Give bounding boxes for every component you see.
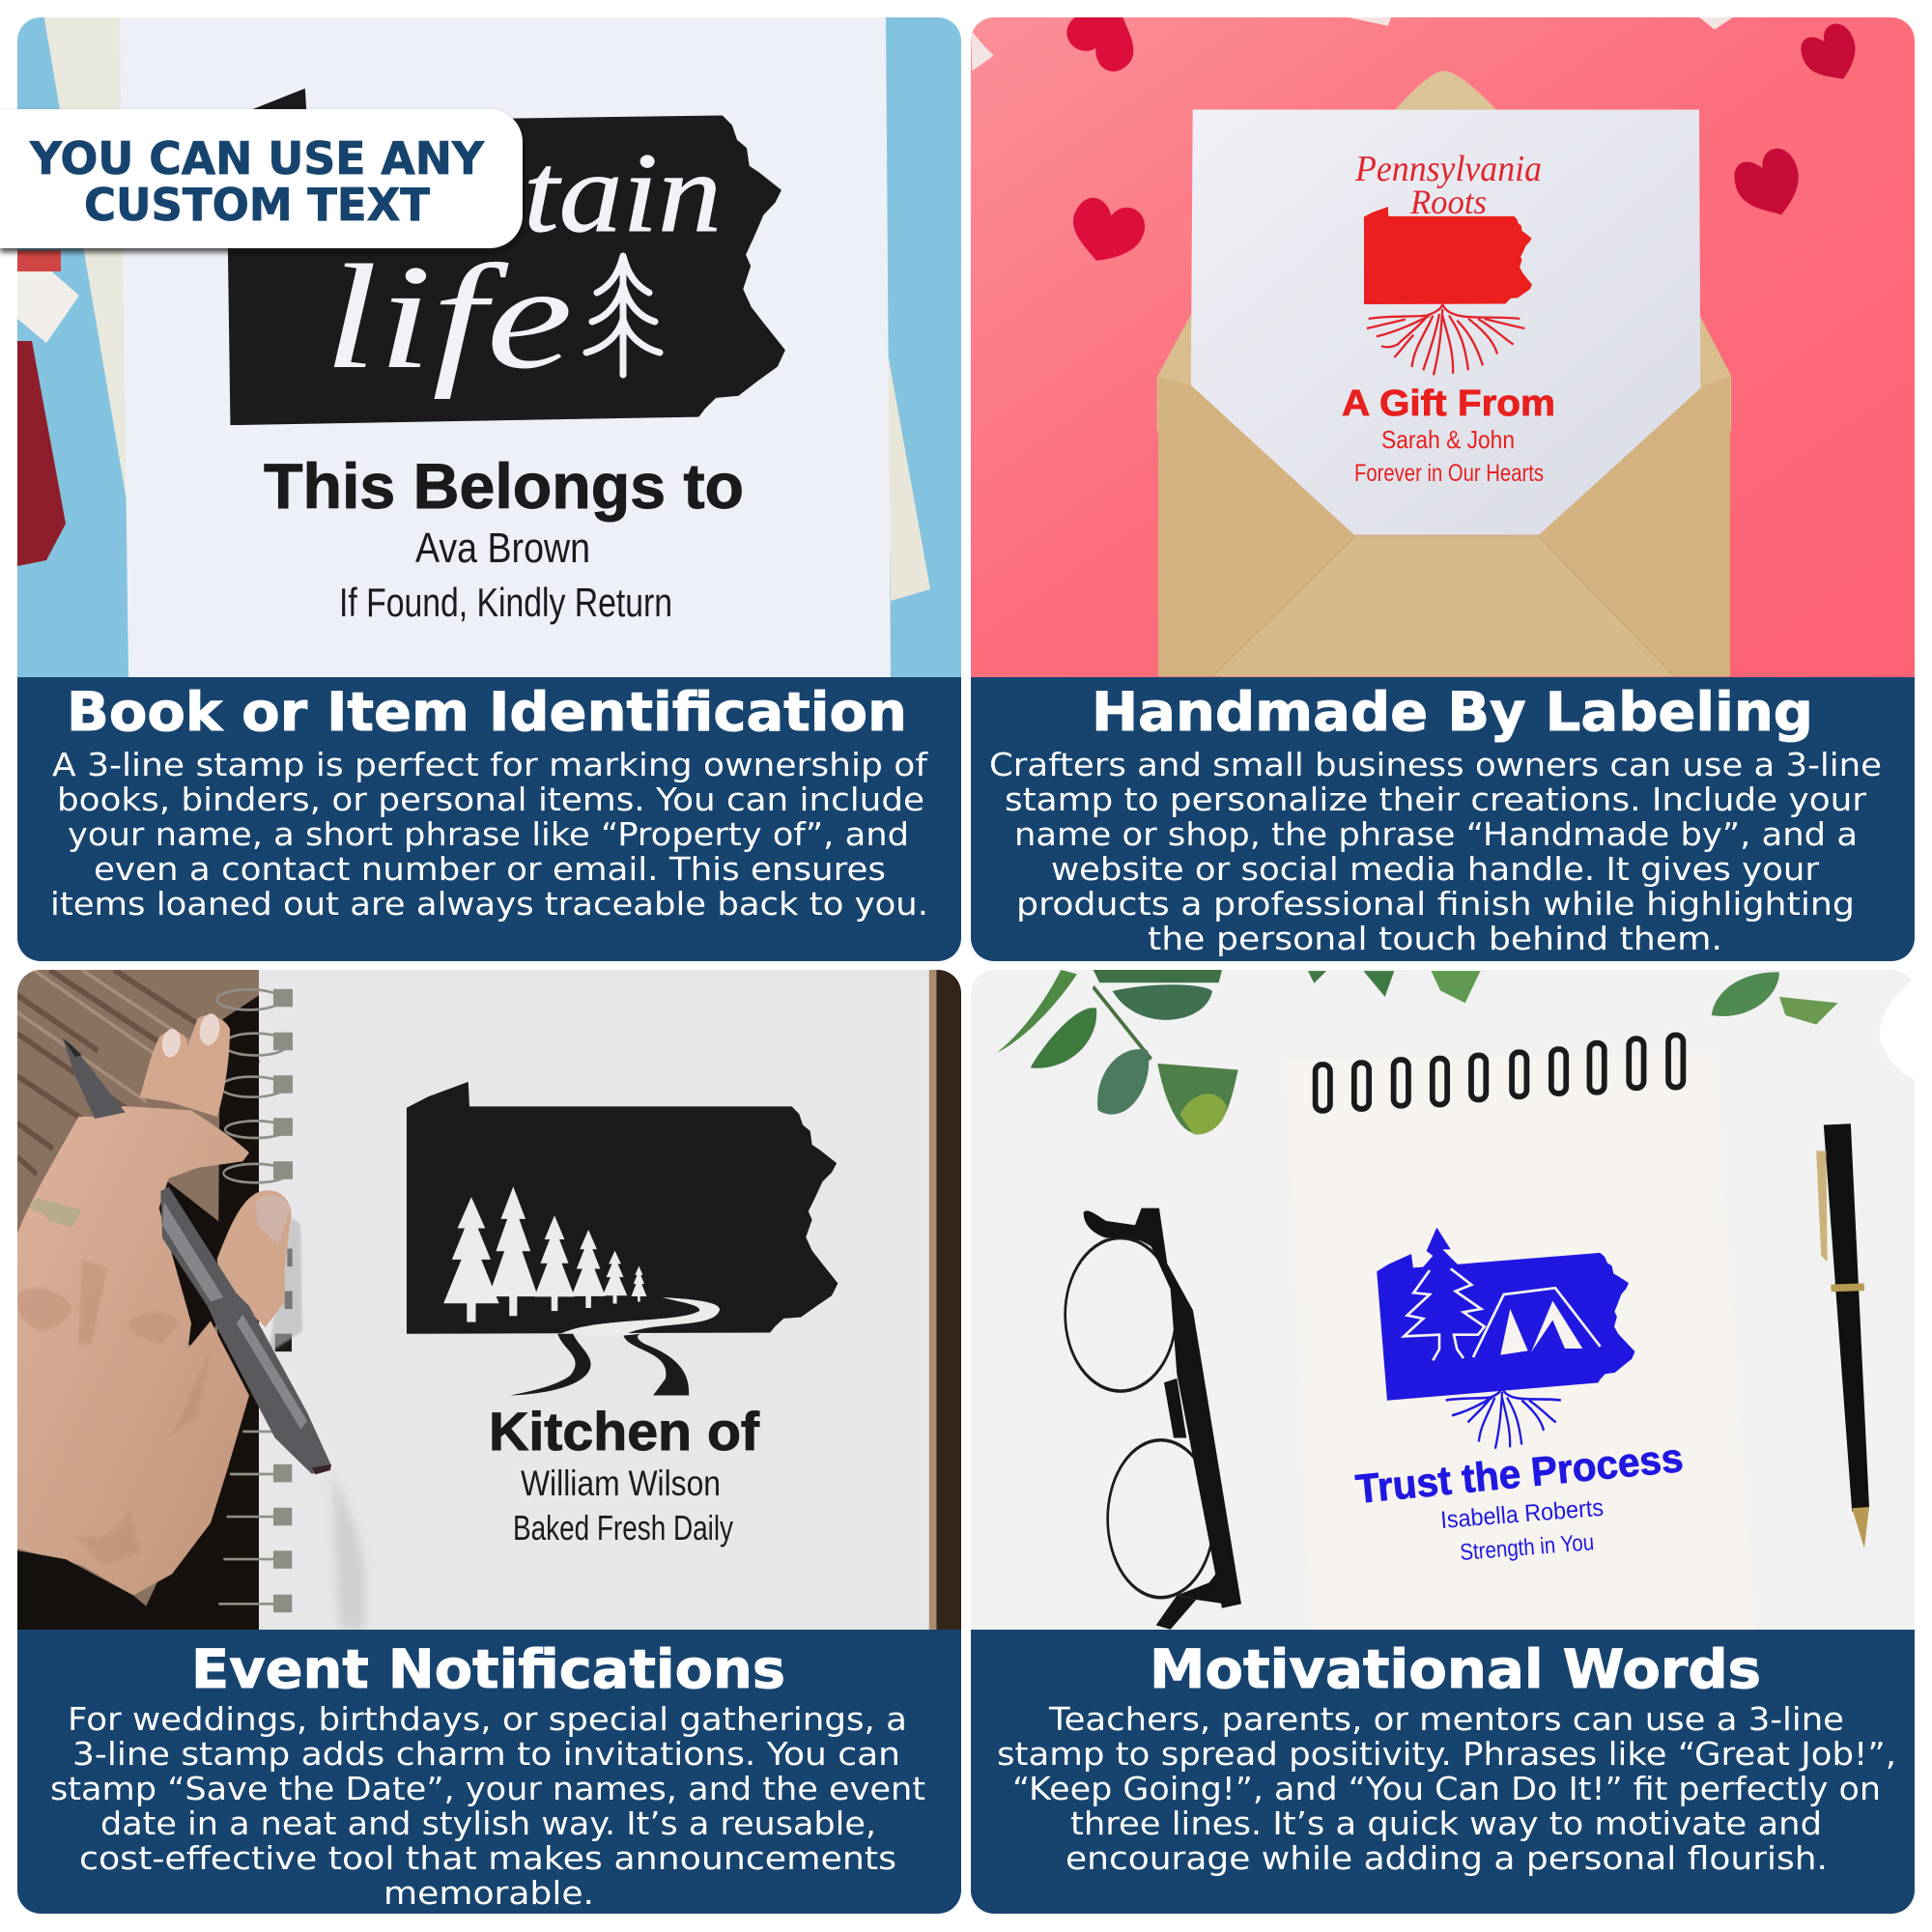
description: stamp to personalize their creations. Include your (1005, 781, 1866, 818)
stamp map: red Pennsylvania (1364, 207, 1532, 304)
description (50, 1700, 925, 1912)
description: books, binders, or personal items. You can include (57, 781, 924, 818)
caption band (971, 677, 1915, 961)
photo: leaves and glasses (997, 970, 1241, 1630)
stamp line: A Gift From: A Gift From (1342, 384, 1555, 424)
stamp script: Pennsylvania: Pennsylvania (1354, 149, 1542, 189)
heading: Event Notifications (191, 1638, 785, 1700)
heading: Handmade By Labeling (1092, 681, 1813, 743)
description: A 3-line stamp is perfect for marking ownership of (52, 746, 929, 783)
description (997, 1700, 1896, 1877)
callout: you can use any custom text: CUSTOM TEXT (84, 179, 431, 231)
stamp line: Kitchen of: Kitchen of (489, 1401, 759, 1462)
stamp map: blue Pennsylvania (1377, 1252, 1634, 1401)
description: encourage while adding a personal flourish. (1065, 1839, 1828, 1877)
description: stamp to spread positivity. Phrases like “Great Job!”, (997, 1735, 1896, 1773)
panel: motivational words (966, 966, 1932, 1914)
description: Teachers, parents, or mentors can use a 3-line (1048, 1700, 1844, 1738)
description: three lines. It’s a quick way to motivate and (1070, 1804, 1822, 1842)
description: “Keep Going!”, and “You Can Do It!” fit perfectly on (1012, 1770, 1881, 1807)
stamp line: Isabella Roberts: Isabella Roberts (1439, 1494, 1605, 1534)
heading: Book or Item Identification (67, 681, 907, 743)
description: your name, a short phrase like “Property of”, and (68, 815, 909, 853)
stamp line: Ava Brown: Ava Brown (415, 525, 590, 572)
description: stamp “Save the Date”, your names, and the event (50, 1770, 925, 1807)
callout: you can use any custom text (0, 109, 523, 252)
description: even a contact number or email. This ensures (94, 850, 886, 888)
stamp roots (1367, 304, 1524, 375)
stamp script: tain: tain (524, 129, 722, 256)
description: name or shop, the phrase “Handmade by”, and a (1014, 815, 1858, 853)
description: 3-line stamp adds charm to invitations. You can (72, 1735, 900, 1773)
caption band (17, 677, 961, 961)
description: memorable. (384, 1874, 594, 1912)
stamp line: Sarah & John: Sarah & John (1381, 425, 1515, 454)
heading: Motivational Words (1150, 1638, 1761, 1700)
stamp line: If Found: If Found, Kindly Return (339, 580, 672, 625)
photo: stamped page on blue table (17, 14, 961, 677)
description: items loaned out are always traceable back to you. (50, 885, 928, 923)
description: date in a neat and stylish way. It’s a reusable, (100, 1804, 876, 1842)
stamp line: Baked Fresh Daily: Baked Fresh Daily (513, 1508, 733, 1548)
photo: hand with pen on spiral (17, 970, 365, 1634)
panel: book or item identification (17, 14, 961, 961)
description (989, 746, 1882, 957)
caption band (971, 1630, 1915, 1914)
callout: you can use any custom text: YOU CAN USE ANY (29, 132, 485, 185)
stamp line: Strength in You: Strength in You (1459, 1529, 1595, 1566)
stamp line: Forever in Our Hearts: Forever in Our Hearts (1354, 460, 1544, 487)
stamp art: tree, tent and roots (1404, 1228, 1601, 1449)
description: cost-effective tool that makes announcements (79, 1839, 896, 1877)
panel: handmade by labeling (966, 0, 1932, 961)
stamp line: William Wilson: William Wilson (521, 1463, 721, 1503)
description (50, 746, 929, 923)
description: products a professional finish while highlighting (1016, 885, 1855, 923)
description: Crafters and small business owners can use a 3-line (989, 746, 1882, 783)
description: For weddings, birthdays, or special gatherings, a (68, 1700, 907, 1738)
stamp line: Trust the Process: Trust the Process (1353, 1435, 1685, 1512)
stamp line: This Belongs to: This Belongs to (264, 450, 744, 522)
stamp script: Roots: Roots (1409, 183, 1487, 221)
stamp script: life: life (324, 234, 573, 400)
photo: notepad, pen and upper leaves (966, 966, 1932, 1632)
description: website or social media handle. It gives your (1051, 850, 1819, 888)
description: the personal touch behind them. (1148, 920, 1722, 957)
photo: card in kraft envelope on pink (966, 0, 1932, 678)
caption band (17, 1630, 961, 1914)
panel: event notifications (17, 966, 967, 1914)
photo: notebook page (259, 966, 967, 1632)
